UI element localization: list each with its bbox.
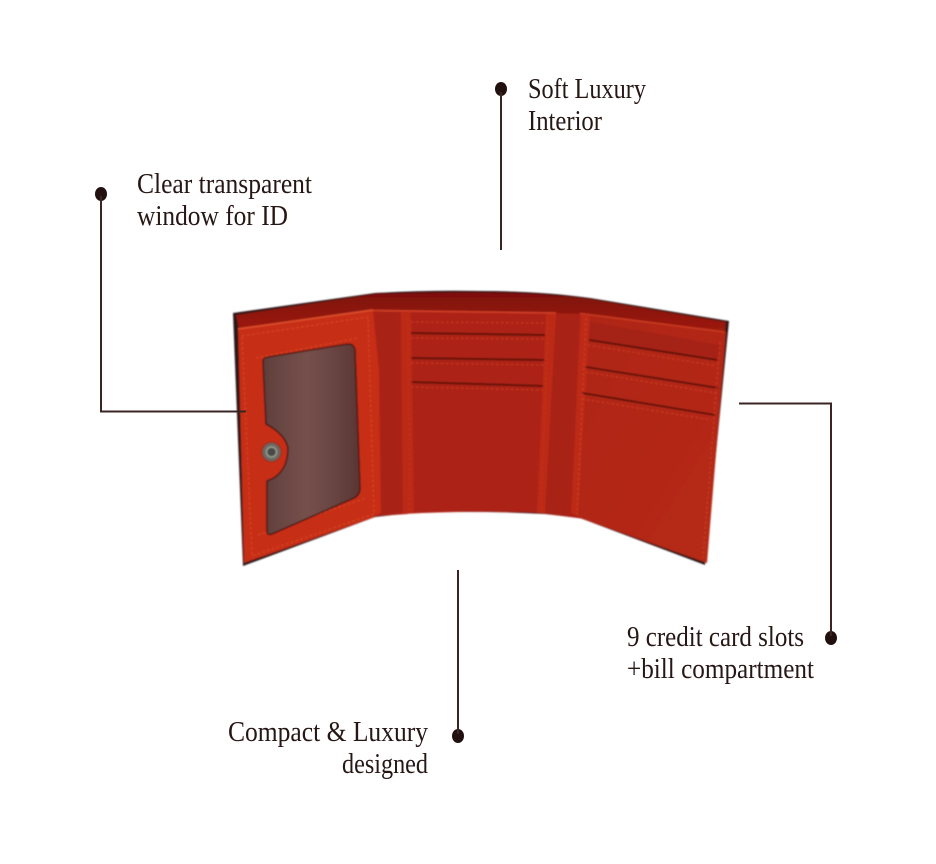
right top highlight: [580, 314, 725, 332]
right gutter: [540, 313, 585, 519]
flap stitching: [242, 317, 374, 556]
callout: clear transparent window: [95, 169, 312, 412]
callout text: Compact & Luxury: [228, 717, 429, 748]
callout text: window for ID: [137, 201, 288, 232]
wallet outer shell: [233, 291, 729, 566]
callout text: Soft Luxury: [528, 74, 647, 105]
right panel with card slots: [571, 313, 726, 563]
callout text: Interior: [528, 106, 602, 137]
callout: soft luxury interior: [495, 74, 647, 250]
centre top highlight: [373, 310, 556, 313]
top lining: [236, 292, 726, 345]
centre card slot edges: [410, 333, 545, 386]
callout: card slots: [627, 404, 837, 685]
right side band: [571, 314, 590, 516]
centre side band: [401, 312, 556, 514]
callout: compact design: [228, 570, 464, 780]
wallet photo: [233, 291, 729, 566]
callout text: 9 credit card slots: [627, 622, 804, 653]
callout text: [137, 169, 312, 232]
flap top highlight: [238, 310, 373, 329]
right card slot edges: [582, 340, 718, 415]
right top slot shading: [589, 322, 720, 360]
marker and leader line: [495, 82, 507, 250]
callout text: Clear transparent: [137, 169, 312, 200]
callout text: [528, 74, 647, 137]
snap button: [262, 442, 281, 462]
marker and leader line: [95, 187, 246, 412]
right stitching: [577, 318, 720, 558]
callout text: [627, 622, 814, 685]
callout text: designed: [342, 749, 428, 780]
transparent ID window: [263, 344, 360, 534]
marker and leader line: [452, 570, 464, 743]
marker and leader line: [739, 404, 837, 645]
centre panel with card slots: [373, 310, 556, 514]
callout text: +bill compartment: [627, 654, 814, 685]
callout text: [228, 717, 429, 780]
centre stitching: [408, 318, 548, 513]
left flap with ID window: [238, 310, 381, 563]
left gutter: [368, 311, 408, 516]
